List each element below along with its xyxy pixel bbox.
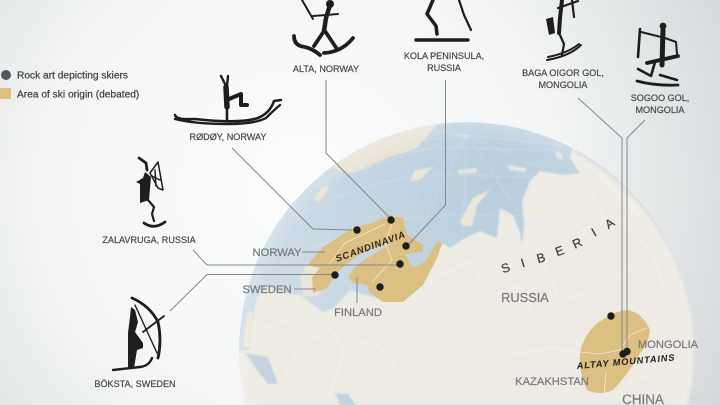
caption: Sogoo Gol <box>631 93 689 115</box>
land: Svalbard <box>410 167 433 182</box>
caption: Rødøy: RØDØY, NORWAY <box>190 132 266 142</box>
caption: Böksta: BÖKSTA, SWEDEN <box>94 379 176 389</box>
caption: Zalavruga: ZALAVRUGA, RUSSIA <box>102 235 197 245</box>
land: western Norway <box>300 262 321 296</box>
area of ski origin: Scandinavia <box>307 215 442 302</box>
land: Iceland <box>314 186 329 203</box>
country label: Finland: FINLAND <box>334 307 382 319</box>
caption: Alta: ALTA, NORWAY <box>293 64 359 74</box>
rock art: Zalavruga <box>136 158 165 226</box>
legend <box>0 70 139 100</box>
legend marker: rock art <box>1 70 11 80</box>
legend marker: origin area <box>0 88 11 99</box>
seas: European inland seas <box>245 353 356 405</box>
globe limb fade <box>239 122 572 352</box>
leader line: Sogoo Gol <box>627 120 645 350</box>
rock art: Böksta <box>113 298 164 370</box>
country label: Kazakhstan: KAZAKHSTAN <box>515 376 589 388</box>
country label: Sweden: SWEDEN <box>242 284 292 296</box>
region label: Scandinavia: SCANDINAVIA <box>334 229 407 265</box>
caption: Sogoo Gol: MONGOLIA <box>635 105 685 115</box>
legend: Rock art depicting skiers <box>17 70 128 82</box>
land: British Isles <box>243 311 253 348</box>
region label: Siberia <box>499 215 618 276</box>
region label: Siberia: A <box>602 215 618 232</box>
caption: Kola Peninsula <box>404 51 484 73</box>
country label: Sweden <box>242 284 316 296</box>
globe <box>239 122 694 405</box>
country label: Finland <box>334 277 382 319</box>
region label: Siberia: R <box>570 235 584 252</box>
caption: Sogoo Gol: SOGOO GOL, <box>631 93 689 103</box>
land: Greenland <box>332 124 437 173</box>
caption: Baga Oigor Gol: MONGOLIA <box>538 80 588 90</box>
borders on origin areas <box>328 216 647 395</box>
area of ski origin: Altay <box>580 310 650 393</box>
leader line: Alta <box>326 80 391 219</box>
land: Novaya Zemlya <box>460 190 490 226</box>
region label: Siberia: S <box>499 260 512 276</box>
land: Europe and Russia <box>236 140 720 405</box>
leader line: Rødøy <box>232 148 352 230</box>
country label: Norway: NORWAY <box>253 247 302 259</box>
rock art: Rødøy <box>175 76 281 124</box>
region label: Siberia: B <box>535 250 547 266</box>
country label: Norway <box>253 247 325 259</box>
country label: Russia: RUSSIA <box>501 290 549 305</box>
leader line: Baga Oigor Gol <box>578 98 622 352</box>
caption: Kola Peninsula: KOLA PENINSULA, <box>404 51 484 61</box>
relief and borders <box>262 175 670 395</box>
leader line: Böksta <box>170 274 332 311</box>
globe right limb shading <box>575 150 696 405</box>
caption: Kola Peninsula: RUSSIA <box>427 63 462 73</box>
rock art: Sogoo Gol <box>637 23 678 85</box>
land: Arctic islands <box>457 152 563 174</box>
leader line: Kola Peninsula <box>408 80 446 245</box>
rock art: Baga Oigor Gol <box>546 0 581 60</box>
caption: Baga Oigor Gol: BAGA OIGOR GOL, <box>522 68 604 78</box>
rock art: Alta <box>294 0 353 55</box>
region label: Siberia: I <box>589 226 599 239</box>
legend: Area of ski origin (debated) <box>17 90 139 100</box>
leader line: Zalavruga <box>193 250 398 265</box>
site dots <box>331 216 631 358</box>
region label: Siberia: I <box>519 256 527 270</box>
region label: Altay Mountains: ALTAY MOUNTAINS <box>575 352 676 371</box>
region label: Siberia: E <box>553 243 566 259</box>
rock art: Kola Peninsula <box>416 0 471 40</box>
caption: Baga Oigor Gol <box>522 68 604 90</box>
country label: Mongolia: MONGOLIA <box>638 339 699 351</box>
